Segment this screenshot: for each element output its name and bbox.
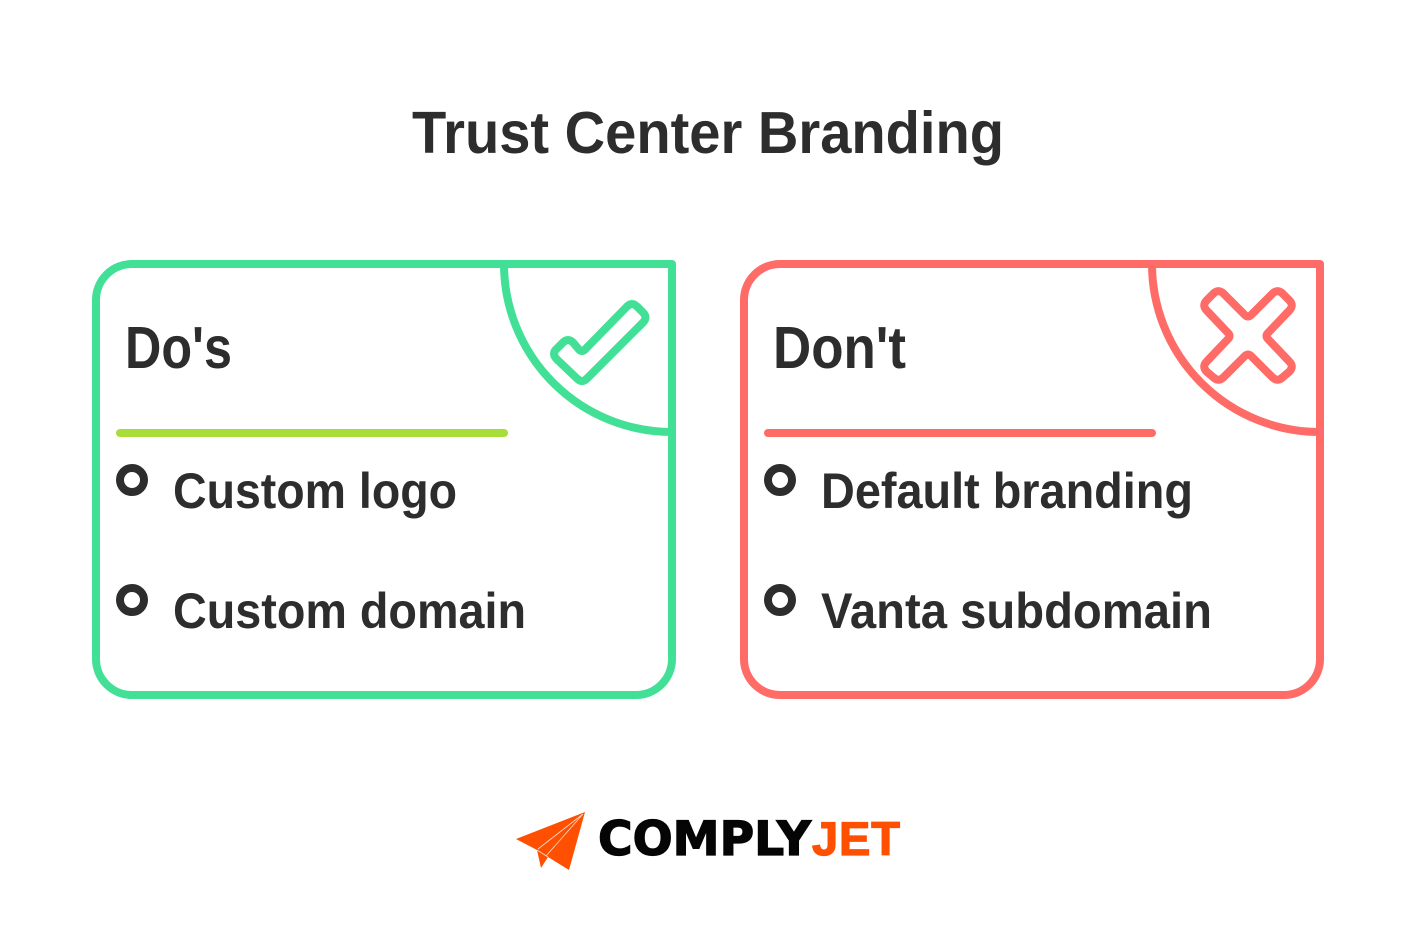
logo: complyjet <box>516 812 900 870</box>
heading: do's: Do's <box>125 315 232 381</box>
wordmark: jet: JET <box>812 812 900 865</box>
icon: paper plane <box>516 812 585 870</box>
corner arc: do's <box>504 264 672 432</box>
divider: don't <box>764 429 1156 437</box>
list item: custom logo: Custom logo <box>173 463 457 519</box>
icon: check mark <box>554 304 646 381</box>
list item: default branding: Default branding <box>821 463 1193 519</box>
divider: do's <box>116 429 508 437</box>
panel: don't <box>744 264 1320 695</box>
panel border: do's <box>96 264 672 695</box>
panel border: don't <box>744 264 1320 695</box>
list item: vanta subdomain: Vanta subdomain <box>821 583 1212 639</box>
corner arc: don't <box>1152 264 1320 432</box>
panel: do's <box>96 264 672 695</box>
list item: custom domain: Custom domain <box>173 583 526 639</box>
icon: cross mark <box>1204 291 1292 380</box>
title: Trust Center Branding <box>412 100 1004 166</box>
heading: don't: Don't <box>773 315 906 381</box>
wordmark: comply: COMPLY <box>598 812 812 867</box>
